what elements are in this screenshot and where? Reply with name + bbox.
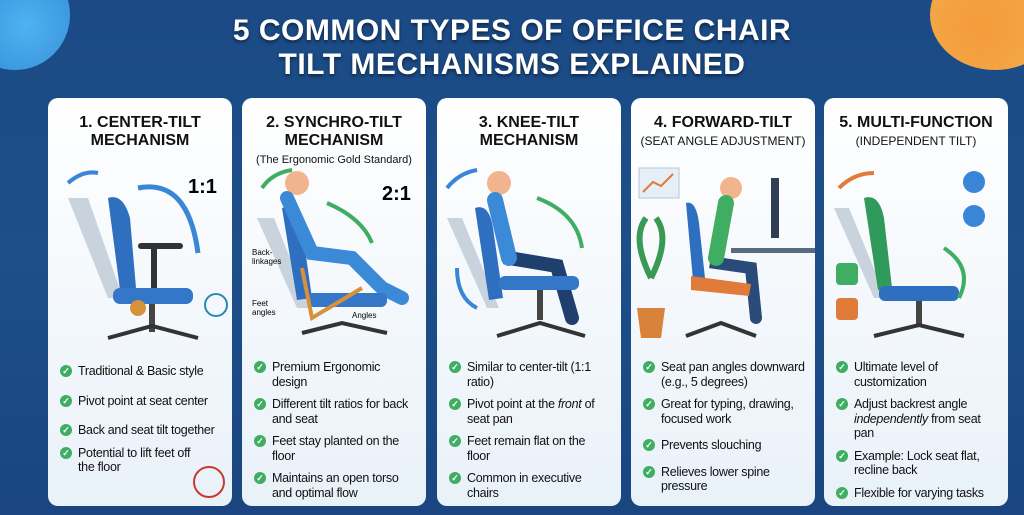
illustration: person in synchro chair: Back- — [252, 248, 273, 257]
heading — [839, 114, 993, 148]
heading: (SEAT ANGLE ADJUSTMENT) — [641, 134, 805, 148]
list: Example: Lock seat flat, recline back — [854, 448, 980, 477]
illustration: chair 1:1 — [66, 170, 228, 340]
list — [60, 364, 215, 474]
list: Flexible for varying tasks — [854, 486, 984, 500]
heading: MECHANISM — [285, 132, 383, 149]
heading: MECHANISM — [91, 132, 189, 149]
list: Traditional & Basic style — [78, 364, 203, 378]
illustration: person knee tilt — [446, 168, 586, 338]
illustration: person in synchro chair — [252, 168, 411, 335]
list: Similar to center-tilt (1:1 ratio) — [467, 360, 591, 388]
list: Relieves lower spine pressure — [661, 464, 770, 493]
illustration: person in synchro chair: Feet — [252, 299, 269, 308]
illustration: person in synchro chair: 2:1 — [382, 183, 411, 205]
heading: 3. KNEE-TILT — [479, 114, 579, 131]
list — [836, 360, 984, 500]
heading: MECHANISM — [480, 132, 578, 149]
list — [449, 360, 595, 500]
heading: 1. CENTER-TILT — [79, 114, 201, 131]
list: Ultimate level of customization — [854, 360, 938, 388]
panel: multi-function — [824, 98, 1008, 506]
panel: synchro-tilt — [242, 98, 426, 506]
heading — [79, 114, 201, 149]
list: Adjust backrest angle independently from seat pan — [854, 397, 981, 440]
title: 5 COMMON TYPES OF OFFICE CHAIR — [233, 14, 791, 47]
heading: (INDEPENDENT TILT) — [856, 134, 976, 148]
list: Pivot point at the front of seat pan — [467, 397, 594, 426]
panel: forward-tilt — [631, 98, 815, 506]
list: Back and seat tilt together — [78, 423, 214, 437]
list: Feet stay planted on the floor — [272, 434, 399, 462]
title — [232, 14, 791, 81]
list: Pivot point at seat center — [78, 394, 208, 408]
heading: (The Ergonomic Gold Standard) — [256, 154, 412, 166]
heading — [256, 114, 412, 166]
list — [254, 360, 408, 500]
list: Maintains an open torso and optimal flow — [272, 471, 399, 500]
heading: 4. FORWARD-TILT — [654, 114, 792, 131]
illustration: person in synchro chair: Angles — [352, 311, 376, 320]
decorative: sun circles — [0, 0, 70, 70]
title: TILT MECHANISMS EXPLAINED — [279, 48, 745, 81]
list: Prevents slouching — [661, 438, 761, 452]
list: Premium Ergonomic design — [272, 360, 380, 388]
illustration: person in synchro chair: angles — [252, 308, 276, 317]
list: Different tilt ratios for back and seat — [272, 397, 408, 426]
list: Seat pan angles downward (e.g., 5 degrees) — [661, 360, 805, 388]
list: Potential to lift feet off the floor — [78, 446, 190, 474]
list — [643, 360, 805, 493]
heading — [479, 114, 579, 149]
illustration: person at desk — [636, 168, 815, 338]
heading: 2. SYNCHRO-TILT — [266, 114, 402, 131]
list: Great for typing, drawing, focused work — [661, 397, 794, 426]
icon: no feet lift — [193, 466, 225, 498]
panel: center-tilt — [48, 98, 232, 506]
list: Common in executive chairs — [467, 471, 582, 500]
panel: knee-tilt — [437, 98, 621, 506]
illustration: person in synchro chair: linkages — [252, 257, 281, 266]
illustration: multi chair with locks — [834, 171, 985, 338]
list: Feet remain flat on the floor — [467, 434, 585, 462]
illustration: chair 1:1: 1:1 — [188, 176, 217, 198]
heading — [641, 114, 805, 148]
heading: 5. MULTI-FUNCTION — [839, 114, 993, 131]
